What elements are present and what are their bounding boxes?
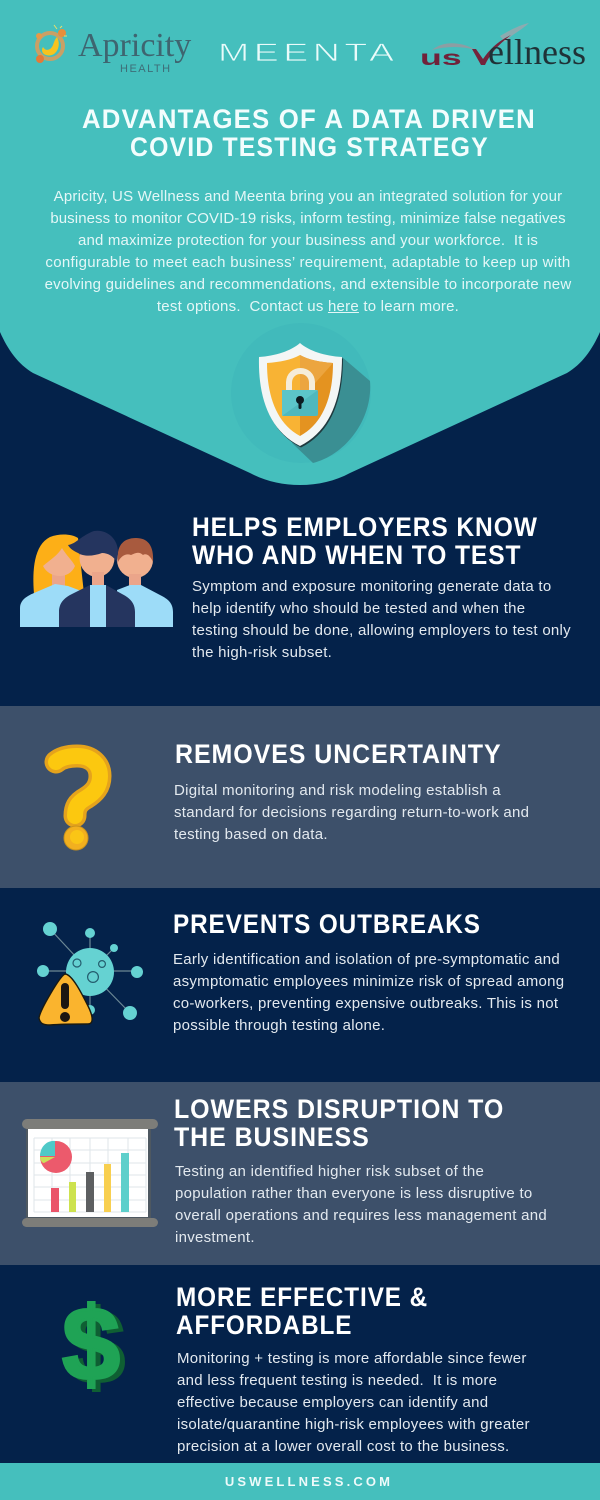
- logo: Meenta: MEENTA: [218, 38, 398, 66]
- text: lowers disruption: overall operations and requires less management and: [175, 1207, 547, 1224]
- text: lowers disruption: Testing an identified higher risk subset of the: [175, 1163, 484, 1180]
- heading: helps employers: WHO AND WHEN TO TEST: [192, 540, 521, 570]
- intro text: Apricity, US Wellness and Meenta bring you an integrated solution for your: [54, 188, 562, 205]
- title: ADVANTAGES OF A DATA DRIVEN: [82, 104, 536, 134]
- text: lowers disruption: population rather than everyone is less disruptive to: [175, 1185, 533, 1202]
- intro text: evolving guidelines and recommendations, and extensible to incorporate new: [45, 276, 571, 293]
- icon: dollar sign: $: [62, 1287, 120, 1403]
- text: helps employers: [192, 578, 571, 661]
- logo: Apricity Health: HEALTH: [120, 63, 172, 75]
- text: removes uncertainty: [174, 782, 529, 843]
- title: COVID TESTING STRATEGY: [130, 132, 489, 162]
- intro text: test options. Contact us here to learn more.: [157, 298, 459, 315]
- text: removes uncertainty: testing based on data.: [174, 826, 328, 843]
- footer bar: USWELLNESS.COM: [225, 1474, 393, 1489]
- text: more effective and affordable: Monitoring + testing is more affordable since fewer: [177, 1350, 527, 1367]
- text: prevents outbreaks: possible through testing alone.: [173, 1017, 385, 1034]
- icon: presentation board with charts: [22, 1119, 158, 1227]
- text: helps employers: Symptom and exposure monitoring generate data to: [192, 578, 551, 595]
- heading: prevents outbreaks: PREVENTS OUTBREAKS: [173, 909, 481, 939]
- text: prevents outbreaks: asymptomatic employees minimize risk of spread among: [173, 973, 564, 990]
- text: more effective and affordable: precision at a lower overall cost to the business.: [177, 1438, 510, 1455]
- panel: removes uncertainty: [0, 706, 600, 888]
- icon: question mark: [44, 744, 112, 850]
- logo: US Wellness: ellness: [488, 32, 586, 72]
- heading: more effective and affordable: MORE EFFECTIVE &: [176, 1282, 428, 1312]
- text: helps employers: testing should be done, allowing employers to test only: [192, 622, 571, 639]
- panel: lowers disruption: [0, 1082, 600, 1265]
- logo: US Wellness: us: [420, 47, 462, 70]
- heading: lowers disruption: THE BUSINESS: [174, 1122, 370, 1152]
- text: helps employers: the high-risk subset.: [192, 644, 332, 661]
- text: prevents outbreaks: [173, 951, 564, 1034]
- text: more effective and affordable: and less frequent testing is needed. It is more: [177, 1372, 497, 1389]
- panel: teal header background: [0, 0, 600, 485]
- heading: more effective and affordable: AFFORDABLE: [176, 1310, 352, 1340]
- text: removes uncertainty: Digital monitoring and risk modeling establish a: [174, 782, 501, 799]
- logo: Apricity Health: Apricity: [78, 26, 191, 64]
- intro text: [45, 188, 572, 315]
- heading: removes uncertainty: REMOVES UNCERTAINTY: [175, 739, 502, 769]
- logo: US Wellness: [420, 23, 586, 72]
- logo: Apricity Health: [35, 24, 192, 75]
- text: prevents outbreaks: co-workers, preventing expensive outbreaks. This is not: [173, 995, 558, 1012]
- text: removes uncertainty: standard for decisions regarding return-to-work and: [174, 804, 529, 821]
- heading: helps employers: [192, 512, 538, 570]
- heading: helps employers: HELPS EMPLOYERS KNOW: [192, 512, 538, 542]
- icon: dollar sign: $: [67, 1290, 125, 1406]
- title: [82, 104, 536, 162]
- icon: virus with warning sign: [37, 922, 143, 1026]
- text: more effective and affordable: [177, 1350, 530, 1455]
- heading: lowers disruption: LOWERS DISRUPTION TO: [174, 1094, 504, 1124]
- icon: three people: [20, 530, 173, 627]
- footer bar: [0, 1463, 600, 1500]
- text: more effective and affordable: isolate/quarantine high-risk employees with greater: [177, 1416, 530, 1433]
- intro text: business to monitor COVID-19 risks, inform testing, minimize false negatives: [50, 210, 566, 227]
- intro text: configurable to meet each business’ requirement, adaptable to keep up with: [45, 254, 571, 271]
- intro text: and maximize protection for your business and your workforce. It is: [78, 232, 538, 249]
- text: more effective and affordable: effective because employers can identify and: [177, 1394, 488, 1411]
- heading: lowers disruption: [174, 1094, 504, 1152]
- heading: more effective and affordable: [176, 1282, 428, 1340]
- text: lowers disruption: investment.: [175, 1229, 255, 1246]
- text: lowers disruption: [175, 1163, 547, 1246]
- text: helps employers: help identify who should be tested and when the: [192, 600, 525, 617]
- icon: shield with padlock: [258, 343, 370, 463]
- text: prevents outbreaks: Early identification and isolation of pre-symptomatic and: [173, 951, 560, 968]
